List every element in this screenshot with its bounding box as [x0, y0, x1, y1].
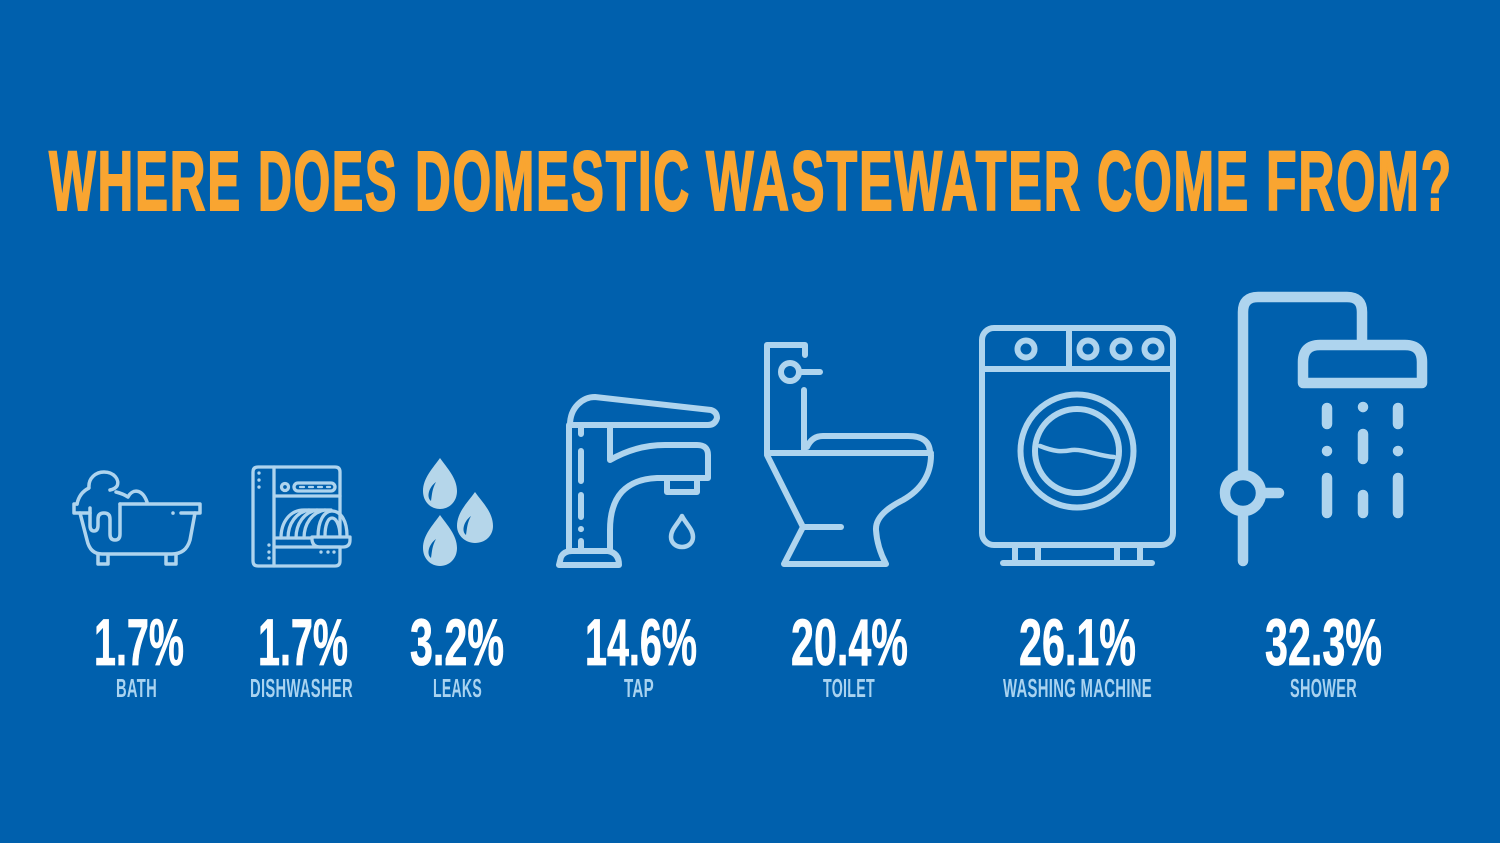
title: COME — [1097, 134, 1250, 228]
value: shower: 32.3% — [1265, 605, 1382, 679]
label: tap: TAP — [624, 675, 654, 703]
label: shower: SHOWER — [1290, 675, 1357, 703]
icon: washing machine — [982, 328, 1173, 563]
label: bath: BATH — [116, 675, 157, 703]
label: toilet: TOILET — [823, 675, 875, 703]
title: WASTEWATER — [706, 134, 1082, 228]
value: leaks: 3.2% — [410, 605, 504, 679]
title: WHERE — [49, 134, 242, 228]
title: DOMESTIC — [415, 134, 691, 228]
icon: water drops — [423, 458, 493, 566]
value: washing machine: 26.1% — [1019, 605, 1136, 679]
column: dishwasher — [250, 467, 353, 703]
label: leaks: LEAKS — [433, 675, 482, 703]
title: DOES — [258, 134, 398, 228]
label: washing machine: WASHING MACHINE — [1003, 675, 1152, 703]
column: bath — [74, 472, 200, 703]
icon: toilet — [767, 345, 931, 564]
icon: bathtub — [74, 472, 200, 564]
value: toilet: 20.4% — [791, 605, 908, 679]
value: dishwasher: 1.7% — [258, 605, 348, 679]
column: toilet — [767, 345, 931, 703]
column: tap — [559, 397, 717, 703]
icon: shower — [1225, 297, 1422, 561]
column: leaks — [410, 458, 504, 703]
icon: tap — [559, 397, 717, 565]
title — [49, 134, 1453, 228]
column: shower — [1225, 297, 1422, 703]
value: tap: 14.6% — [585, 605, 697, 679]
column: washing machine — [982, 328, 1173, 703]
value: bath: 1.7% — [94, 605, 184, 679]
label: dishwasher: DISHWASHER — [250, 675, 353, 703]
icon: dishwasher — [253, 467, 350, 566]
